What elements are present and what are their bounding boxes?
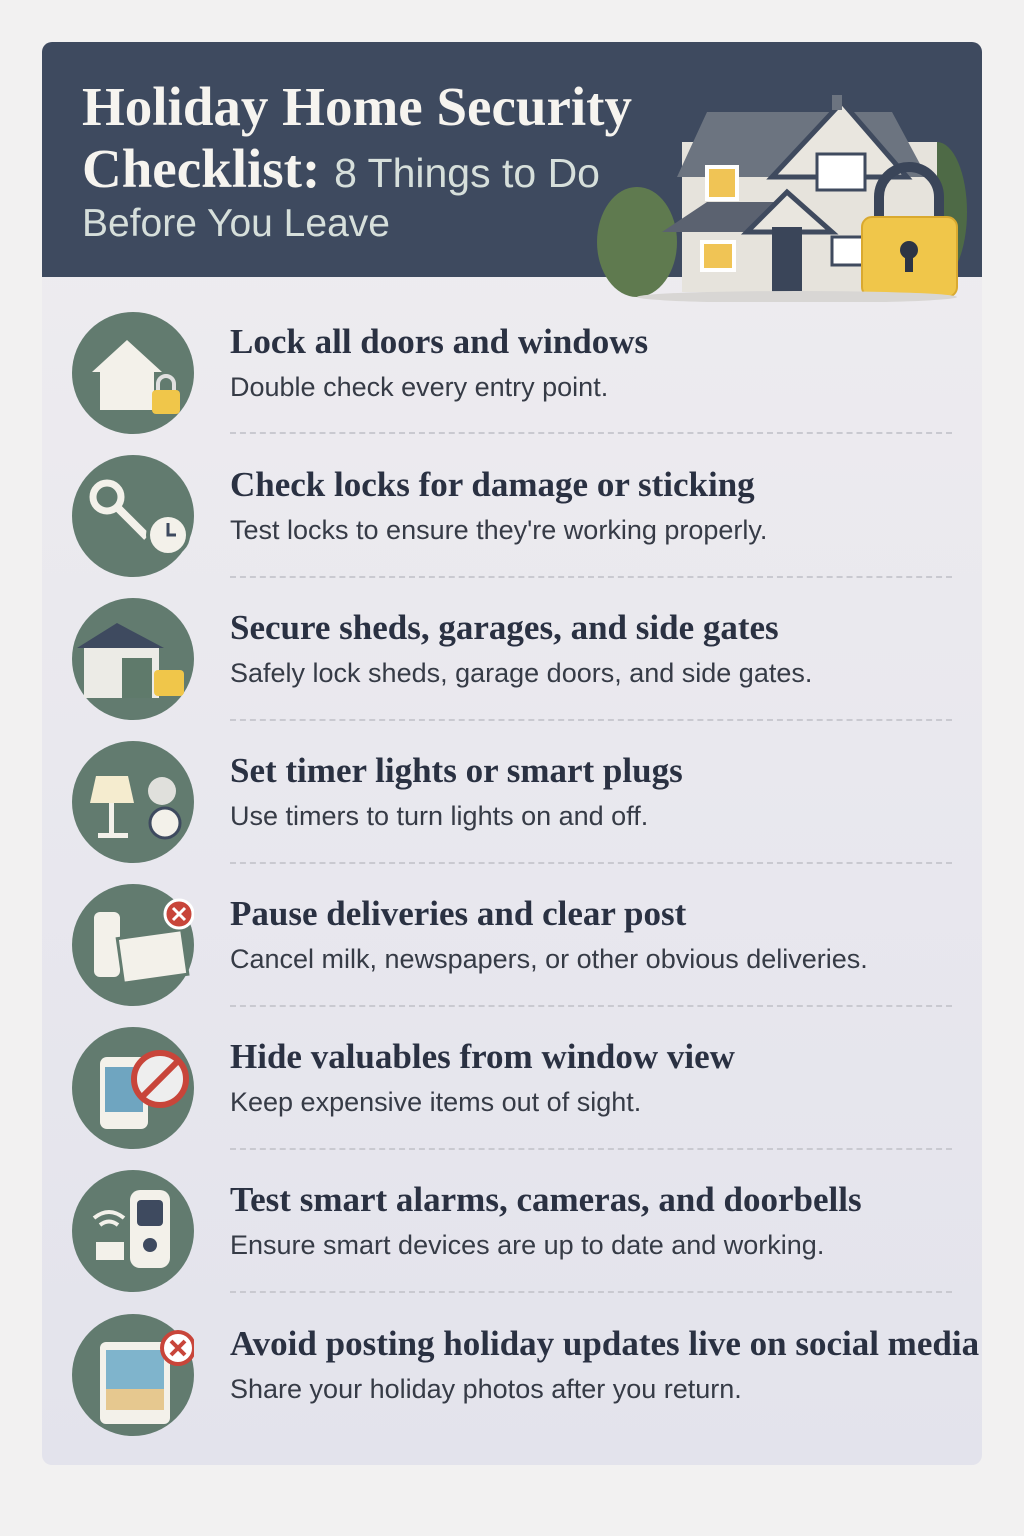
icon: house lock [72,312,194,434]
item 3: Secure sheds, garages, and side gates [230,608,779,647]
item 2: Check locks for damage or sticking [230,465,755,504]
title [82,76,632,199]
icon: lamp timer [72,741,194,863]
item 1 [72,312,648,434]
item 5: Cancel milk, newspapers, or other obvious deliveries. [230,944,868,974]
illustration: house with padlock [597,95,967,302]
icon: tablet beach no [72,1314,194,1436]
item 7: Ensure smart devices are up to date and working. [230,1230,824,1260]
icon: doorbell camera [72,1170,194,1292]
item 8: Avoid posting holiday updates live on social media [230,1324,979,1363]
item 8: Share your holiday photos after you return. [230,1374,742,1404]
item 1: Lock all doors and windows [230,322,648,361]
item 6 [72,1027,735,1149]
item 8 [72,1314,979,1436]
item 7: Test smart alarms, cameras, and doorbells [230,1180,862,1219]
item 6: Hide valuables from window view [230,1037,735,1076]
item 4: Use timers to turn lights on and off. [230,801,648,831]
subtitle: Before You Leave [82,202,390,245]
icon: phone no-view [72,1027,194,1149]
item 3: Safely lock sheds, garage doors, and side gates. [230,658,812,688]
title: Checklist: 8 Things to Do [82,138,600,199]
item 5 [72,884,868,1006]
header band [42,42,982,277]
item 2 [72,455,767,577]
item 2: Test locks to ensure they're working properly. [230,515,767,545]
item 3 [72,598,812,720]
item 7 [72,1170,862,1292]
title: Holiday Home Security [82,76,632,137]
icon: keys clock [72,455,194,577]
icon: milk and post [72,884,194,1006]
item 6: Keep expensive items out of sight. [230,1087,641,1117]
icon: garage lock [72,598,194,720]
item 1: Double check every entry point. [230,372,608,402]
item 5: Pause deliveries and clear post [230,894,686,933]
item 4: Set timer lights or smart plugs [230,751,683,790]
item 4 [72,741,683,863]
